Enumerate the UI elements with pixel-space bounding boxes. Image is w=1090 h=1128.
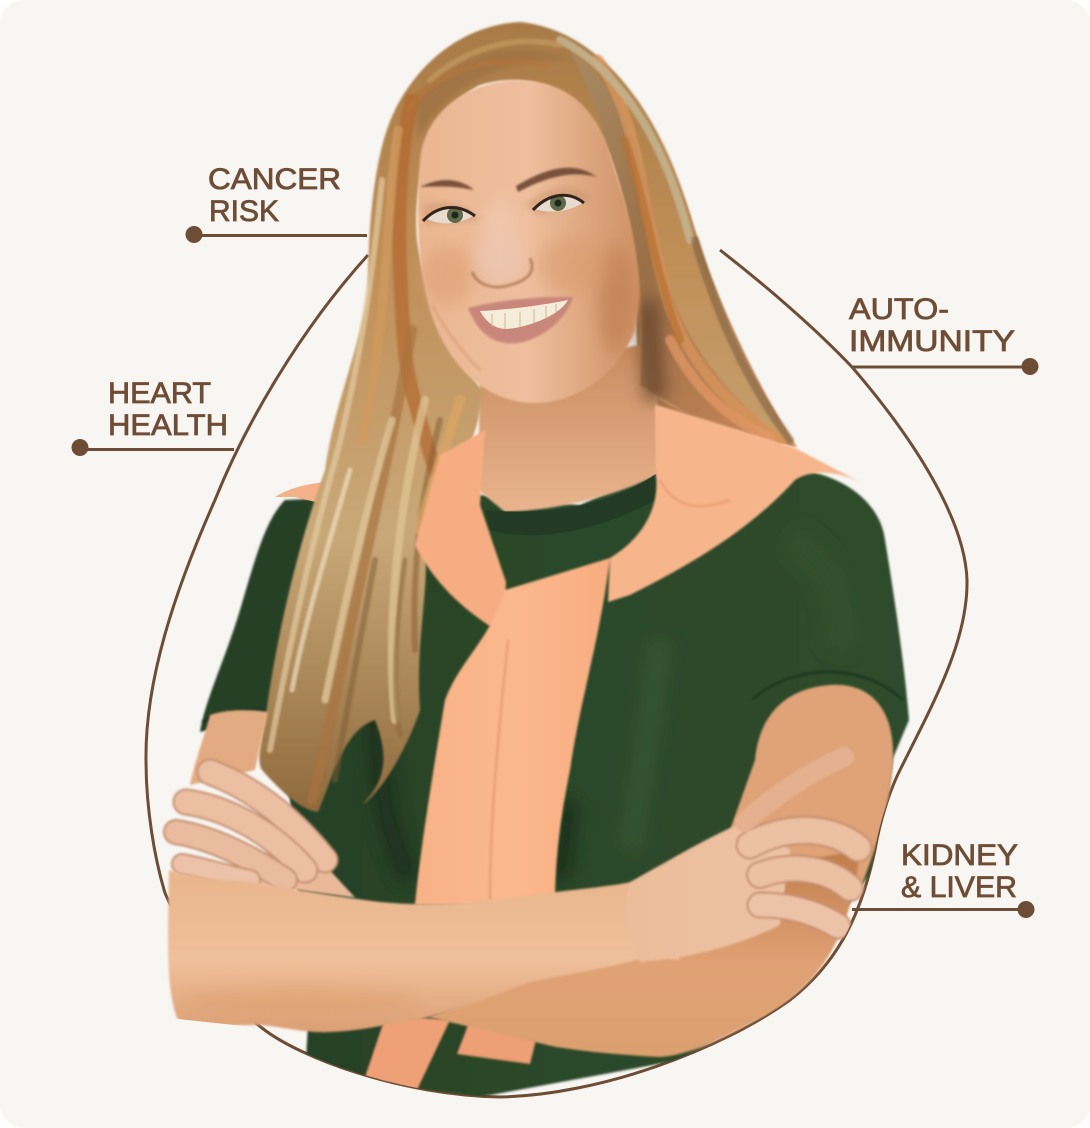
scarf tail right — [457, 1020, 536, 1064]
nose — [477, 260, 484, 270]
rear forearm — [428, 850, 860, 1057]
shirt body — [200, 470, 909, 1097]
neck — [478, 345, 658, 512]
scarf hanging strip — [415, 558, 610, 905]
neckline collar — [485, 474, 656, 535]
blob outline — [146, 250, 967, 1097]
scarf — [365, 405, 860, 1090]
scarf right knot band — [608, 405, 860, 602]
eye right — [535, 197, 583, 212]
label: autoimmunity: IMMUNITY — [849, 325, 1015, 358]
back of hand — [626, 820, 790, 962]
fingers — [745, 757, 858, 926]
label: cancer risk — [186, 163, 367, 243]
long hair left — [259, 22, 795, 812]
hair strands — [270, 40, 790, 800]
thumb — [745, 757, 844, 822]
label: heart health: HEART — [108, 377, 211, 410]
scarf tail left — [365, 1015, 450, 1090]
eye socket shading — [422, 187, 592, 225]
label: autoimmunity — [849, 293, 1038, 375]
label: kidney and liver — [852, 839, 1034, 918]
teeth — [480, 300, 568, 329]
front forearm and right hand — [168, 757, 858, 1032]
hair right band — [570, 50, 795, 447]
portrait of smiling woman — [168, 22, 909, 1097]
eyebrows — [420, 168, 597, 192]
shoulder scarf peek — [275, 482, 322, 502]
label: cancer risk: RISK — [209, 195, 279, 228]
scarf left collar — [415, 430, 506, 635]
face — [418, 80, 639, 403]
label: kidney and liver: KIDNEY — [901, 839, 1018, 872]
forearm — [168, 870, 680, 1032]
left hand fingers — [176, 772, 350, 895]
right upper arm behind — [730, 685, 893, 890]
left upper arm — [190, 710, 268, 785]
lips — [468, 297, 573, 343]
label: heart health — [72, 377, 234, 456]
label: heart health: HEALTH — [108, 409, 228, 442]
eye left — [425, 209, 473, 223]
sleeve hems — [202, 710, 270, 722]
label: autoimmunity: AUTO- — [849, 293, 949, 326]
label: cancer risk: CANCER — [208, 163, 341, 196]
back hair right — [602, 133, 798, 448]
hair shadow beside cheek — [648, 300, 655, 400]
label: kidney and liver: & LIVER — [901, 871, 1017, 904]
crown shading — [416, 53, 550, 134]
